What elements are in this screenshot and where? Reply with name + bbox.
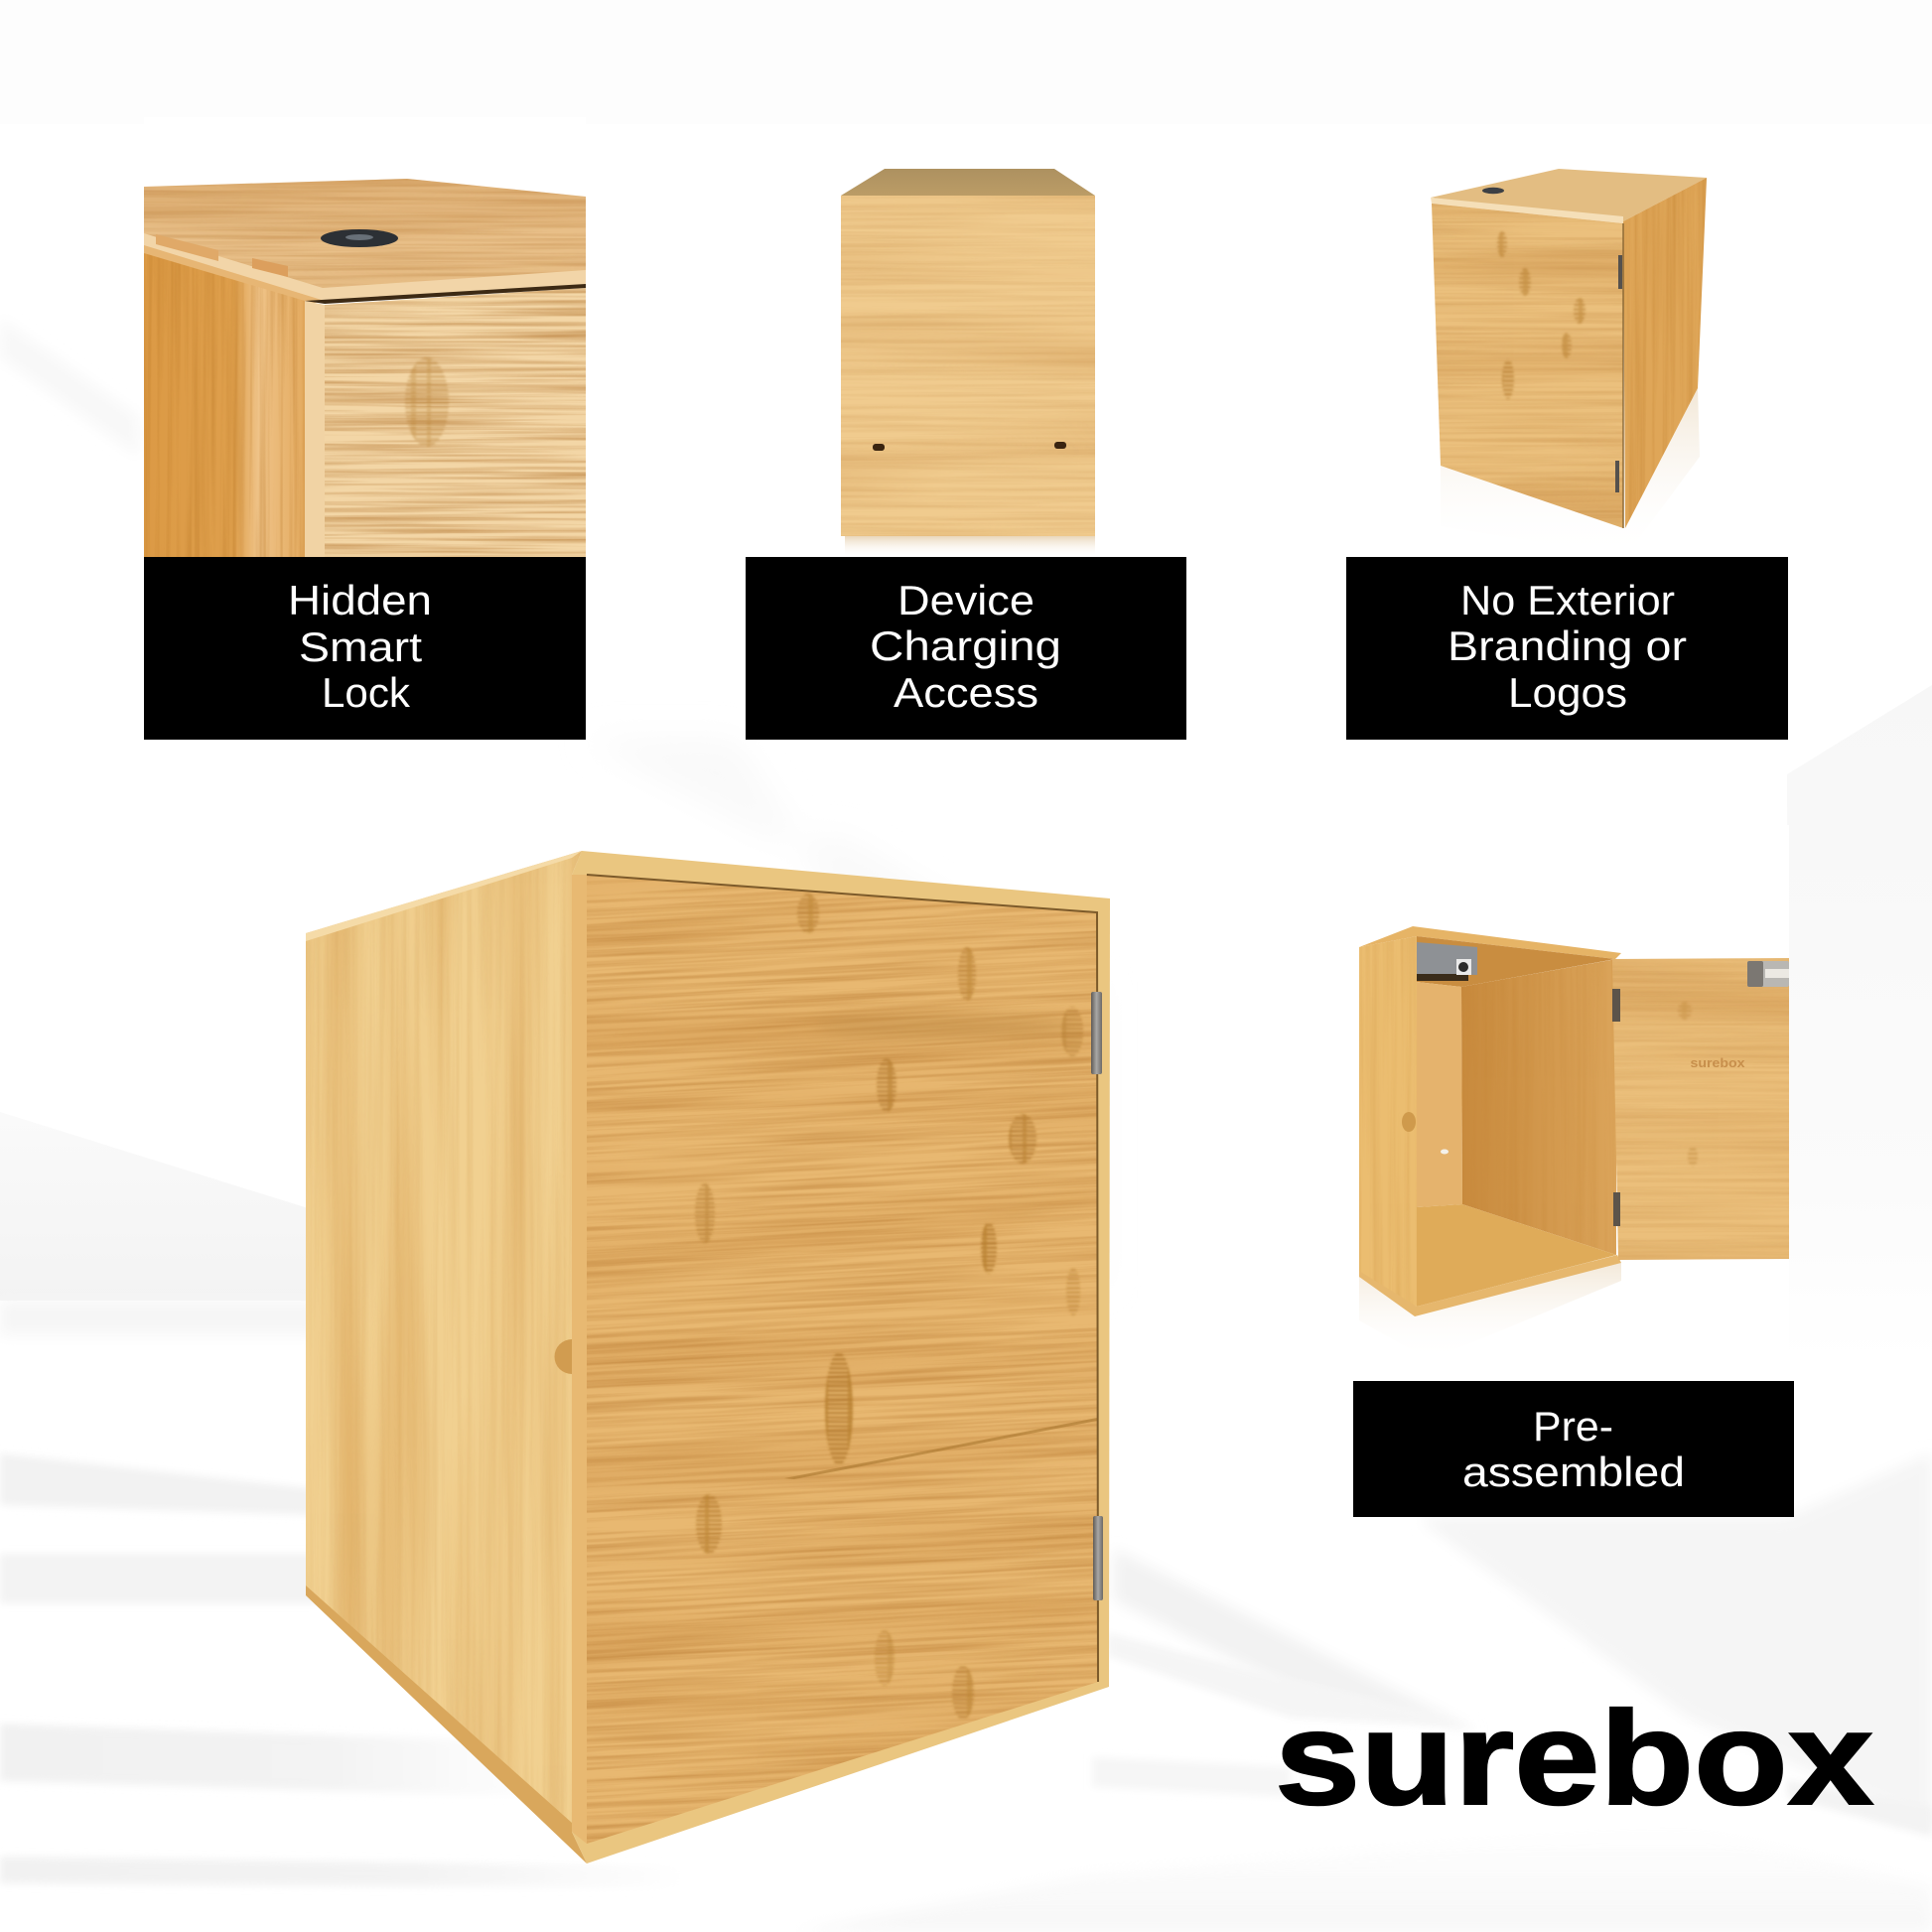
open box top edge [1359, 926, 1621, 959]
top door lip [1431, 198, 1623, 223]
floor reflection [845, 536, 1095, 557]
inner left wall [1417, 982, 1462, 1207]
caption: hidden smart lock: Lock [322, 669, 411, 716]
door outline shadow [587, 875, 1098, 1682]
panel: hidden smart lock [144, 179, 586, 557]
door bamboo knots [695, 894, 1083, 1720]
lock box left side [144, 248, 308, 557]
caption: hidden smart lock: Smart [299, 623, 422, 670]
thumb notch [555, 1339, 572, 1374]
caption: pre-assembled [1353, 1381, 1794, 1517]
panel: pre-assembled open box [1359, 825, 1789, 1381]
main product: closed bamboo box [306, 840, 1158, 1880]
engraved inside door logo: surebox [1690, 1055, 1745, 1070]
box top [1431, 169, 1707, 221]
reflection under box [1359, 1263, 1621, 1360]
ceiling [1417, 936, 1615, 987]
caption: pre-assembled: assembled [1462, 1449, 1685, 1495]
lock box door edge [305, 301, 325, 557]
back panel face [841, 196, 1095, 536]
panel: no exterior branding [1431, 169, 1707, 528]
caption: no exterior branding or logos: Branding or [1448, 622, 1687, 669]
cable slots [873, 442, 1066, 451]
caption: device charging access: Access [894, 669, 1038, 716]
reflection under box [1441, 388, 1700, 557]
caption: pre-assembled: Pre- [1533, 1403, 1613, 1449]
floor [1417, 1204, 1616, 1307]
door edge [1622, 223, 1624, 528]
logo: surebox: surebox [1275, 1685, 1873, 1833]
thumb notch [1402, 1112, 1416, 1132]
front bottom lip [1359, 1255, 1621, 1316]
box frame [572, 851, 1110, 1863]
box left side [306, 851, 587, 1863]
upper hinge [1091, 992, 1102, 1074]
caption: hidden smart lock [144, 557, 586, 740]
back wall [1461, 959, 1616, 1255]
caption: device charging access: Device [897, 577, 1035, 623]
lock box door [325, 283, 586, 557]
back panel top surface [841, 169, 1095, 196]
caption: no exterior branding or logos [1346, 557, 1788, 740]
door edge strip [572, 875, 587, 1844]
lock box top surface [144, 177, 586, 306]
caption: hidden smart lock: Hidden [288, 577, 432, 623]
smart lock disc [321, 229, 398, 247]
hinges and lock [1482, 188, 1622, 492]
box side [1623, 178, 1707, 528]
door latch bracket [1747, 961, 1789, 987]
box door with bamboo grain [587, 876, 1097, 1844]
door gap shadow [305, 284, 586, 304]
top plate underside lip [144, 245, 325, 305]
caption: no exterior branding or logos: No Exterior [1460, 577, 1675, 623]
lower hinge [1093, 1516, 1103, 1600]
open door [1612, 958, 1789, 1260]
door hinges [1612, 989, 1620, 1226]
box door [1430, 204, 1624, 528]
open box left side [1359, 936, 1417, 1307]
caption: device charging access: Charging [870, 622, 1061, 669]
screw hole [1441, 1150, 1449, 1154]
caption: device charging access [746, 557, 1186, 740]
door plank seam [784, 1418, 1097, 1479]
panel: device charging access [841, 169, 1095, 550]
smart lock module [1417, 942, 1477, 981]
caption: no exterior branding or logos: Logos [1508, 669, 1627, 716]
